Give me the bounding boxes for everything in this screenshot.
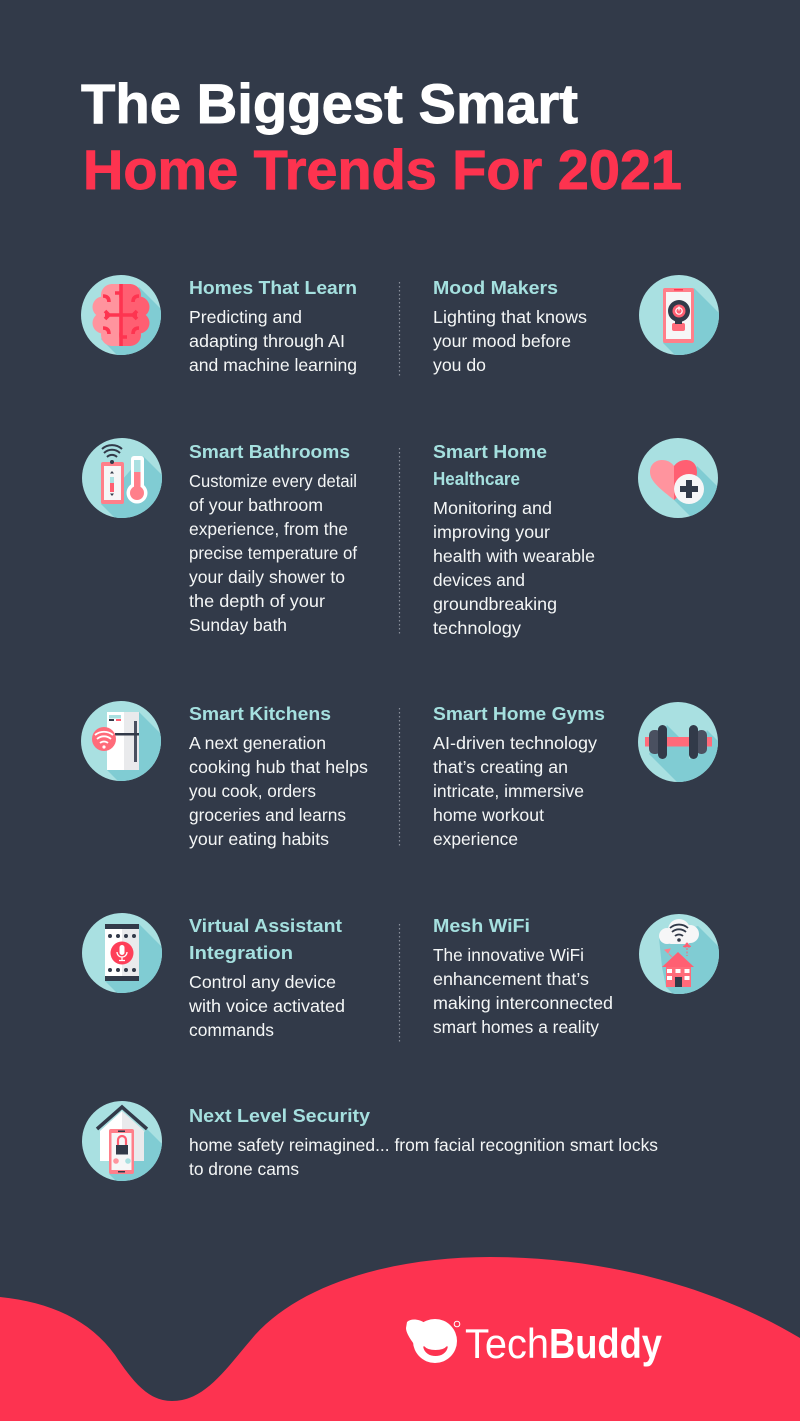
description: the depth of your bbox=[189, 591, 325, 611]
title bbox=[81, 72, 682, 201]
description bbox=[189, 733, 368, 849]
description bbox=[189, 307, 357, 375]
heading bbox=[189, 915, 342, 963]
icon: shower control and thermometer bbox=[82, 438, 162, 518]
panel: mood makers bbox=[433, 275, 719, 374]
description bbox=[433, 498, 595, 638]
description: enhancement that’s bbox=[433, 969, 589, 989]
description: improving your bbox=[433, 522, 550, 542]
description: AI-driven technology bbox=[433, 733, 597, 753]
description: your mood before bbox=[433, 331, 571, 351]
description: adapting through AI bbox=[189, 331, 345, 351]
description: that’s creating an bbox=[433, 757, 568, 777]
icon: fridge with wifi bbox=[81, 701, 161, 781]
heading: Integration bbox=[189, 942, 293, 963]
icon: cloud wifi and house bbox=[639, 914, 719, 994]
heading: Homes That Learn bbox=[189, 277, 357, 298]
title: Home Trends For 2021 bbox=[83, 138, 682, 201]
heading: Mesh WiFi bbox=[433, 915, 530, 936]
heading: Healthcare bbox=[433, 468, 520, 489]
description: home safety reimagined... from facial recognition smart locks bbox=[189, 1135, 658, 1155]
description: experience, from the bbox=[189, 519, 348, 539]
heading: Next Level Security bbox=[189, 1105, 371, 1126]
panel: smart bathrooms bbox=[82, 438, 357, 635]
panel: mesh wifi bbox=[433, 914, 746, 1037]
panel: virtual assistant integration bbox=[82, 913, 345, 1040]
description: making interconnected bbox=[433, 993, 613, 1013]
description: commands bbox=[189, 1020, 274, 1040]
description: health with wearable bbox=[433, 546, 595, 566]
description: groundbreaking bbox=[433, 594, 557, 614]
icon: phone with light bulb bbox=[639, 275, 719, 355]
description bbox=[188, 972, 345, 1040]
heading: Mood Makers bbox=[433, 277, 558, 298]
title: The Biggest Smart bbox=[81, 72, 578, 135]
description bbox=[433, 307, 587, 375]
panel: smart home gyms bbox=[433, 702, 745, 849]
description: cooking hub that helps bbox=[189, 757, 368, 777]
description: Monitoring and bbox=[433, 498, 552, 518]
description: precise temperature of bbox=[189, 543, 357, 563]
description: Control any device bbox=[189, 972, 336, 992]
description bbox=[433, 733, 597, 849]
heading: Smart Bathrooms bbox=[189, 441, 350, 462]
description: The innovative WiFi bbox=[433, 945, 584, 965]
logo: TechBuddy bbox=[406, 1319, 663, 1367]
description: and machine learning bbox=[189, 355, 357, 375]
panel: next level security bbox=[82, 1101, 658, 1181]
description: Lighting that knows bbox=[433, 307, 587, 327]
description: A next generation bbox=[189, 733, 326, 753]
description: technology bbox=[433, 618, 521, 638]
description: you do bbox=[433, 355, 486, 375]
icon: house with phone lock bbox=[82, 1101, 162, 1181]
description: experience bbox=[433, 829, 518, 849]
description: home workout bbox=[433, 805, 544, 825]
description bbox=[189, 1135, 658, 1179]
description: you cook, orders bbox=[189, 781, 316, 801]
panel: homes that learn bbox=[81, 275, 357, 383]
logo: TechBuddy: Buddy bbox=[549, 1320, 663, 1367]
description bbox=[189, 471, 357, 635]
panel: smart home healthcare bbox=[433, 438, 745, 638]
icon: smiling face bbox=[406, 1319, 460, 1363]
description: Customize every detail bbox=[189, 471, 357, 491]
heading: Virtual Assistant bbox=[189, 915, 342, 936]
icon: brain bbox=[81, 275, 161, 355]
footer wave bbox=[0, 1257, 800, 1421]
description: devices and bbox=[433, 570, 525, 590]
heading: Smart Home Gyms bbox=[433, 703, 605, 724]
description: your eating habits bbox=[189, 829, 329, 849]
description: smart homes a reality bbox=[433, 1017, 599, 1037]
description: intricate, immersive bbox=[433, 781, 584, 801]
description: of your bathroom bbox=[189, 495, 323, 515]
icon: phone with microphone bbox=[82, 913, 162, 993]
description: with voice activated bbox=[188, 996, 345, 1016]
description: groceries and learns bbox=[189, 805, 346, 825]
description: your daily shower to bbox=[189, 567, 345, 587]
heading: Smart Home bbox=[433, 441, 547, 462]
description: Predicting and bbox=[189, 307, 302, 327]
description: to drone cams bbox=[189, 1159, 299, 1179]
description: Sunday bath bbox=[189, 615, 287, 635]
heading bbox=[433, 441, 547, 489]
icon: heart with plus bbox=[638, 438, 718, 518]
description bbox=[433, 945, 613, 1037]
heading: Smart Kitchens bbox=[189, 703, 331, 724]
icon: dumbbell bbox=[638, 702, 718, 782]
logo: TechBuddy: Tech bbox=[465, 1320, 549, 1367]
panel: smart kitchens bbox=[81, 701, 368, 849]
